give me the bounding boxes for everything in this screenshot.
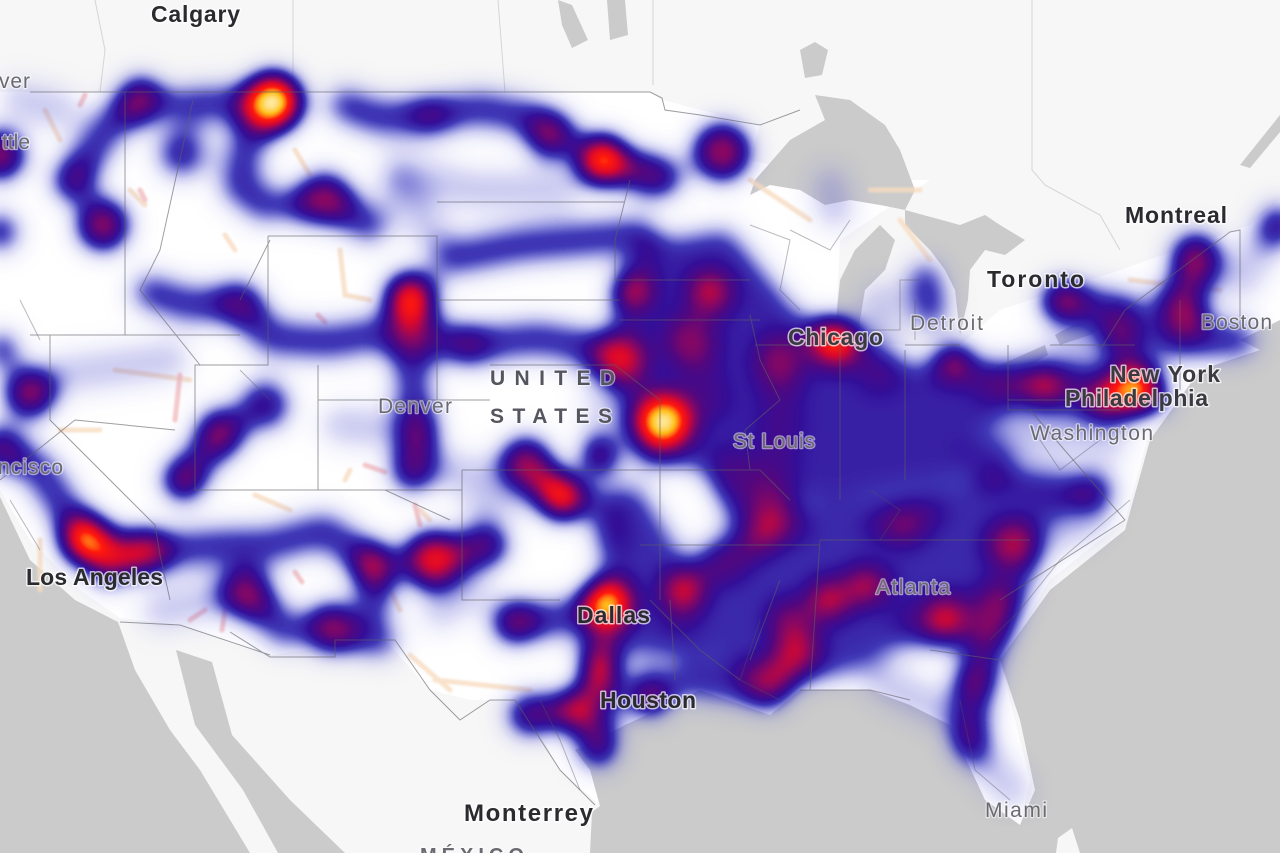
country label: United States: STATES bbox=[490, 405, 612, 428]
hot spot: Dallas bbox=[580, 578, 632, 630]
country label: United States bbox=[490, 367, 615, 428]
heat corridors bbox=[0, 100, 1240, 750]
hot spot: Chicago bbox=[811, 316, 859, 364]
lake: north left bbox=[558, 0, 588, 48]
warm spots bbox=[88, 134, 1123, 730]
city label: Miami: Miami bbox=[985, 799, 1047, 822]
red: North Dakota bbox=[576, 134, 628, 186]
red: Georgia bbox=[925, 600, 965, 640]
city label: Denver: Denver bbox=[378, 395, 452, 418]
midwest density mass bbox=[610, 225, 1175, 560]
hot spot: New York bbox=[1111, 366, 1159, 414]
red: Wichita bbox=[539, 473, 587, 521]
blue: outlying spots bbox=[239, 379, 291, 431]
red: Texas bbox=[664, 570, 704, 610]
blue: spots on corridors bbox=[53, 158, 97, 202]
light halos bbox=[20, 100, 1260, 790]
red: Wyoming bbox=[383, 270, 439, 326]
highway traces bbox=[40, 110, 1220, 690]
southern density mass bbox=[590, 470, 1105, 690]
lake: Huron bbox=[905, 210, 1025, 335]
city label: Monterrey: Monterrey bbox=[464, 800, 594, 827]
city label: Toronto: Toronto bbox=[987, 266, 1084, 292]
city label: Houston: Houston bbox=[600, 687, 696, 713]
red: Iowa bbox=[612, 270, 652, 310]
hot spot: Kansas City bbox=[635, 394, 691, 450]
water: Gulf of Mexico and Atlantic bbox=[575, 320, 1280, 853]
island: Cuba tip bbox=[1056, 828, 1080, 853]
lake: Superior bbox=[750, 95, 915, 210]
lake: Michigan bbox=[835, 225, 895, 375]
city label: New York: New York bbox=[1110, 361, 1220, 387]
lake: Ontario bbox=[1055, 300, 1120, 345]
city label: St Louis: St Louis bbox=[733, 430, 815, 453]
city label: Detroit: Detroit bbox=[910, 312, 983, 335]
lake: north centre bbox=[607, 0, 628, 40]
lake: Erie bbox=[960, 345, 1048, 395]
city label: Montreal: Montreal bbox=[1125, 202, 1227, 228]
red: Inland Empire bbox=[121, 528, 169, 576]
hot spot: Los Angeles bbox=[60, 514, 112, 566]
country label: United States: UNITED bbox=[490, 367, 615, 390]
red: Detroit-Toledo bbox=[935, 342, 971, 378]
purple: blobs on corridors bbox=[116, 74, 168, 126]
red: Omaha bbox=[594, 334, 646, 386]
county-style detail lines bbox=[10, 220, 1130, 800]
city label: Boston: Boston bbox=[1201, 311, 1272, 334]
red: Philadelphia bbox=[1087, 384, 1123, 420]
hot spot: Havre bbox=[243, 72, 303, 132]
interior corridors bbox=[600, 340, 1130, 620]
water: Pacific Ocean bbox=[0, 497, 250, 853]
water: Gulf of California bbox=[176, 650, 345, 853]
city label: Atlanta: Atlanta bbox=[876, 576, 950, 599]
lake: Winnipeg region bbox=[800, 42, 828, 78]
city label: Philadelphia: Philadelphia bbox=[1065, 385, 1208, 411]
city label: Dallas: Dallas bbox=[577, 602, 650, 628]
St Lawrence estuary bbox=[1240, 115, 1280, 168]
hot spots bbox=[60, 72, 1159, 630]
city label: Seattle fragment: ttle bbox=[2, 131, 30, 154]
Great Lakes bbox=[558, 0, 1280, 395]
purple: isolated blobs bbox=[76, 198, 130, 252]
city label: Washington: Washington bbox=[1030, 422, 1153, 445]
city label: Calgary: Calgary bbox=[151, 1, 240, 27]
city label: Los Angeles: Los Angeles bbox=[26, 564, 163, 590]
city label: Chicago: Chicago bbox=[788, 324, 883, 350]
Canadian province boundaries bbox=[95, 0, 1120, 250]
pink congestion traces bbox=[80, 95, 420, 630]
